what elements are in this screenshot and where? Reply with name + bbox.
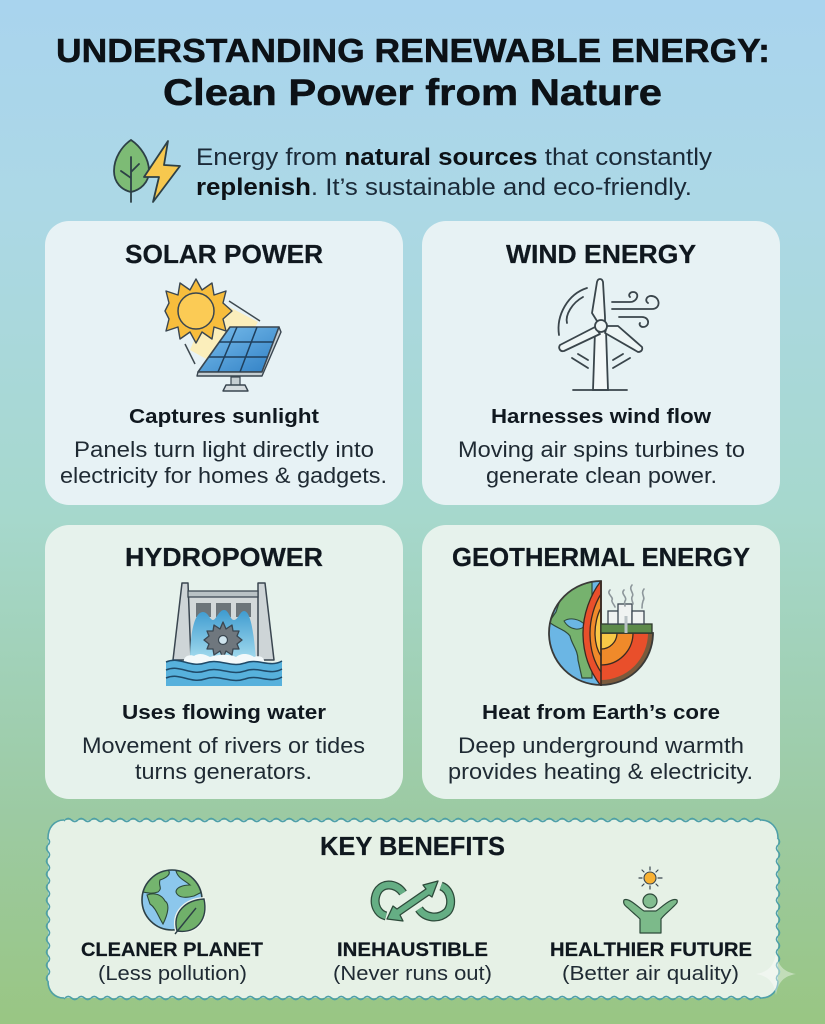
benefit label: inexhaustible bbox=[333, 939, 492, 985]
benefit label: cleaner planet: CLEANER PLANET bbox=[81, 939, 263, 961]
body text: wind: Moving air spins turbines to bbox=[458, 437, 745, 462]
benefit label: cleaner planet bbox=[81, 939, 263, 985]
panel: hydropower bbox=[45, 525, 403, 799]
icon: hydro dam bbox=[166, 583, 282, 686]
body text: hydro: turns generators. bbox=[135, 759, 312, 784]
heading: hydropower: HYDROPOWER bbox=[125, 542, 323, 572]
panel: geothermal energy bbox=[422, 525, 780, 799]
benefit label: healthier future bbox=[550, 939, 752, 985]
heading: geothermal energy: GEOTHERMAL ENERGY bbox=[452, 542, 750, 572]
body text: solar bbox=[60, 437, 387, 488]
subheading: captures sunlight: Captures sunlight bbox=[129, 405, 319, 428]
icon: healthy person with sun bbox=[624, 867, 677, 933]
heading: wind energy: WIND ENERGY bbox=[506, 239, 696, 269]
body text: geothermal bbox=[448, 733, 753, 784]
icon: infinity arrows bbox=[375, 881, 451, 921]
benefit label: healthier future: HEALTHIER FUTURE bbox=[550, 939, 752, 961]
title bbox=[56, 32, 770, 113]
body text: wind bbox=[458, 437, 745, 488]
benefit label: healthier future: (Better air quality) bbox=[562, 963, 739, 985]
subheading: heat from earth's core: Heat from Earth’s core bbox=[482, 701, 720, 724]
panel: key benefits bbox=[45, 817, 781, 1001]
body text: hydro: Movement of rivers or tides bbox=[82, 733, 365, 758]
body text: solar: electricity for homes & gadgets. bbox=[60, 463, 387, 488]
intro text: Energy from natural sources that constantly bbox=[196, 144, 713, 171]
panel: solar power bbox=[45, 221, 403, 505]
body text: geothermal: provides heating & electricity. bbox=[448, 759, 753, 784]
body text: geothermal: Deep underground warmth bbox=[458, 733, 744, 758]
benefit label: cleaner planet: (Less pollution) bbox=[98, 963, 247, 985]
panel: wind energy bbox=[422, 221, 780, 505]
title: UNDERSTANDING RENEWABLE ENERGY: bbox=[56, 32, 770, 69]
subheading: uses flowing water: Uses flowing water bbox=[122, 701, 326, 724]
benefit label: inexhaustible: (Never runs out) bbox=[333, 963, 492, 985]
body text: solar: Panels turn light directly into bbox=[74, 437, 374, 462]
intro text bbox=[196, 144, 713, 201]
icon: leaf and lightning bolt bbox=[114, 140, 180, 202]
icon: earth cross-section bbox=[549, 581, 653, 686]
intro text: replenish. It’s sustainable and eco-friendly. bbox=[196, 174, 692, 201]
icon: sun and solar panel bbox=[165, 279, 281, 391]
subheading: harnesses wind flow: Harnesses wind flow bbox=[491, 405, 711, 428]
body text: hydro bbox=[82, 733, 365, 784]
icon: sparkle watermark bbox=[756, 953, 796, 995]
gear bbox=[204, 622, 242, 658]
heading: solar power: SOLAR POWER bbox=[125, 239, 323, 269]
body text: wind: generate clean power. bbox=[486, 463, 717, 488]
benefit label: inexhaustible: INEHAUSTIBLE bbox=[337, 939, 488, 961]
title: Clean Power from Nature bbox=[163, 72, 662, 113]
icon: globe with leaf bbox=[142, 870, 205, 934]
heading: key benefits: KEY BENEFITS bbox=[320, 831, 505, 861]
icon: wind turbine bbox=[559, 279, 659, 390]
